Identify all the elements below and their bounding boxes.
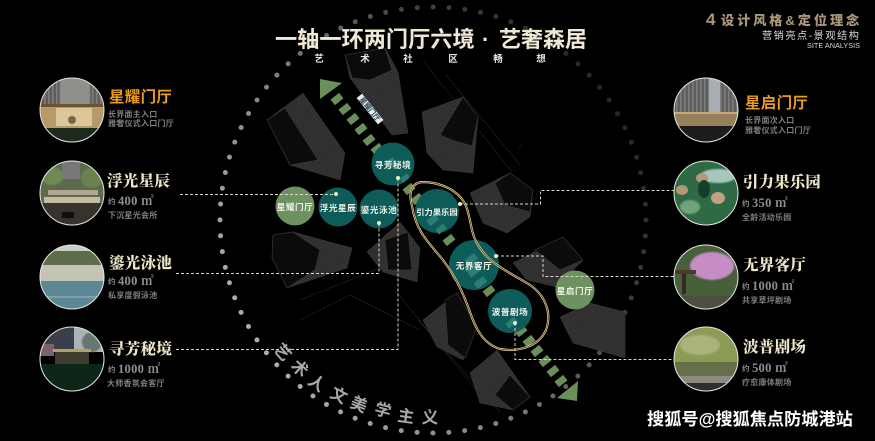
- title: ·: [482, 27, 489, 52]
- right item: 无界客厅: 无界客厅: [743, 255, 806, 274]
- node: 寻芳秘境: 寻芳秘境: [375, 159, 411, 170]
- arc slogan: 术: [287, 356, 313, 381]
- node: 引力果乐园: 引力果乐园: [416, 207, 458, 217]
- arc slogan: 人: [305, 371, 329, 396]
- right item: 引力果乐园: 引力果乐园: [743, 173, 821, 191]
- right item: 无界客厅: [674, 245, 806, 309]
- left item: 寻芳秘境: [40, 327, 172, 392]
- right item: 无界客厅: 约: [742, 281, 750, 291]
- header: section label: SITE ANALYSIS: [807, 41, 860, 50]
- node: 星启门厅: 星启门厅: [557, 285, 593, 296]
- arc slogan: 艺: [270, 340, 295, 365]
- photo: [40, 327, 104, 392]
- right item: 无界客厅: 1000 ㎡: [752, 279, 795, 293]
- arc slogan: 义: [422, 408, 439, 427]
- title: 一轴一环两门厅六境: [275, 27, 475, 52]
- left item: 浮光星辰: [40, 161, 170, 225]
- left item: 星耀门厅: [40, 78, 174, 142]
- left item: 寻芳秘境: 约: [108, 364, 116, 374]
- header: section label: 设计风格&定位理念: [721, 12, 862, 28]
- tag on axis: 星耀门厅: [358, 95, 382, 123]
- arc slogan: 文: [327, 382, 351, 408]
- right item: 波普剧场: 约: [742, 363, 750, 373]
- left item: 浮光星辰: 400 ㎡: [118, 194, 154, 208]
- left item: 浮光星辰: 浮光星辰: [107, 171, 170, 190]
- photo: [40, 245, 104, 311]
- right item: 引力果乐园: 350 ㎡: [752, 196, 788, 210]
- axis: green dashed arrow: [320, 79, 578, 401]
- node: 星耀门厅: 星耀门厅: [277, 201, 313, 212]
- right item: 星启门厅: 星启门厅: [745, 93, 808, 112]
- left item: 浮光星辰: 下沉星光会所: [108, 210, 158, 220]
- site plan buildings: [267, 48, 625, 412]
- left item: 寻芳秘境: 大师香氛会客厅: [107, 378, 165, 388]
- dotted ring: [220, 7, 646, 433]
- left item: 鎏光泳池: 私享度假泳池: [108, 290, 158, 300]
- right item: 引力果乐园: [674, 161, 821, 225]
- right item: 星启门厅: 长界面次入口: [745, 115, 794, 125]
- header: section label: 4: [706, 10, 716, 29]
- left item: 星耀门厅: 雅奢仪式入口门厅: [108, 118, 174, 128]
- right item: 无界客厅: 共享草坪剧场: [742, 295, 792, 305]
- left item: 鎏光泳池: [40, 245, 172, 311]
- arc slogan: 美: [348, 392, 371, 417]
- node: 星耀门厅: [276, 186, 314, 226]
- arrowhead: north-west: [320, 79, 342, 99]
- right item: 引力果乐园: 约: [742, 198, 750, 208]
- ring loop path: [410, 182, 548, 350]
- right item: 波普剧场: 疗愈康体剧场: [742, 377, 792, 387]
- right item: 波普剧场: 波普剧场: [743, 337, 806, 356]
- node: 无界客厅: 无界客厅: [456, 260, 492, 271]
- right item: 波普剧场: 500 ㎡: [752, 361, 788, 375]
- node: 引力果乐园: [415, 189, 459, 234]
- photo: [674, 327, 738, 391]
- node: 波普剧场: [488, 289, 532, 333]
- right item: 波普剧场: [674, 327, 806, 391]
- subtitle: 艺: [314, 53, 324, 65]
- node: 无界客厅: [449, 240, 499, 290]
- photo: [674, 245, 738, 309]
- photo: [674, 161, 738, 225]
- arrowhead: south-east: [557, 381, 578, 401]
- photo: [40, 161, 104, 225]
- subtitle: 社: [403, 53, 413, 65]
- arc slogan: 主: [396, 406, 415, 427]
- left item: 星耀门厅: 长界面主入口: [108, 109, 158, 119]
- left item: 鎏光泳池: 400 ㎡: [118, 274, 154, 288]
- subtitle: 术: [360, 53, 370, 65]
- watermark: 搜狐号@搜狐焦点防城港站: [647, 409, 853, 429]
- left item: 寻芳秘境: 寻芳秘境: [109, 339, 172, 358]
- node: 浮光星辰: [318, 188, 358, 226]
- photo: [674, 78, 738, 142]
- leader lines: [176, 176, 674, 360]
- left item: 星耀门厅: 星耀门厅: [109, 88, 172, 106]
- right item: 引力果乐园: 全龄活动乐园: [742, 212, 792, 222]
- photo: [40, 78, 104, 142]
- node: 星启门厅: [556, 270, 594, 310]
- title: [275, 27, 587, 52]
- subtitle: 想: [536, 53, 546, 65]
- arc slogan: 学: [372, 398, 394, 422]
- header: section label: 营销亮点-景观结构: [762, 29, 860, 42]
- header: section label: [706, 10, 862, 50]
- subtitle: 畅: [493, 53, 503, 65]
- right item: 星启门厅: 雅奢仪式入口门厅: [745, 125, 811, 135]
- node: 寻芳秘境: [372, 142, 414, 186]
- node: 鎏光泳池: [360, 190, 398, 228]
- axis dashes: [331, 93, 567, 387]
- left item: 鎏光泳池: 鎏光泳池: [109, 253, 172, 272]
- title: 艺奢森居: [499, 27, 587, 52]
- left item: 鎏光泳池: 约: [108, 276, 116, 286]
- subtitle: 区: [448, 54, 458, 65]
- left item: 浮光星辰: 约: [108, 196, 116, 206]
- node: 波普剧场: 波普剧场: [492, 306, 528, 317]
- arc slogan: [270, 340, 439, 427]
- right item: 星启门厅: [674, 78, 811, 142]
- node: 浮光星辰: 浮光星辰: [320, 202, 356, 213]
- left item: 寻芳秘境: 1000 ㎡: [118, 362, 161, 376]
- node: 鎏光泳池: 鎏光泳池: [361, 204, 397, 215]
- subtitle: [314, 53, 546, 65]
